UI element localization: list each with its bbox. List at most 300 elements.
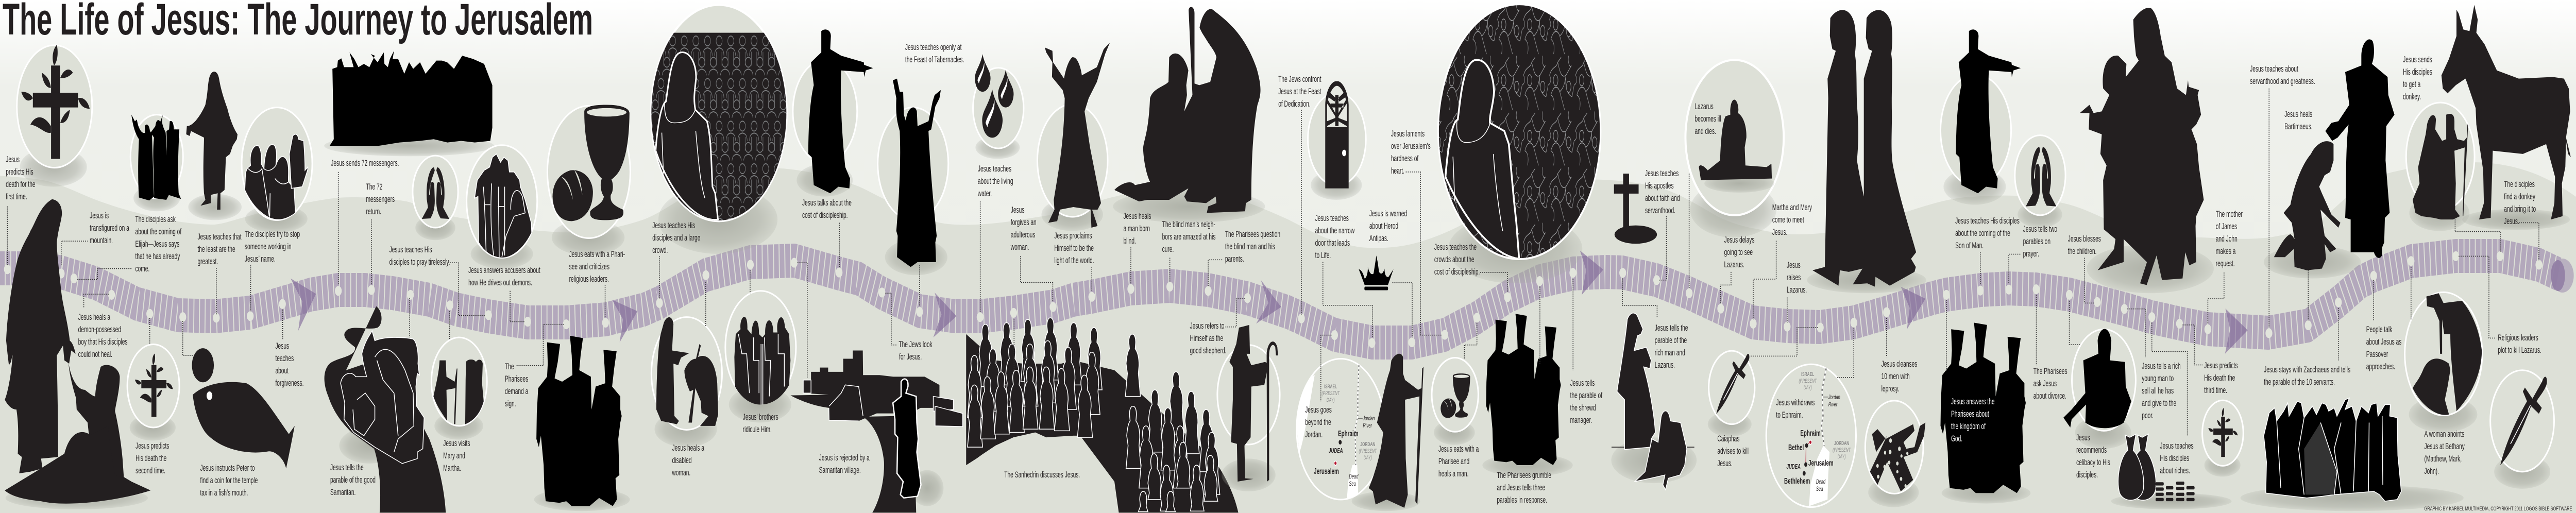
illustration: two disciples xyxy=(2406,102,2475,231)
timeline stops xyxy=(4,264,186,322)
label: find a coin for the temple xyxy=(200,476,258,485)
illustration: Pharisees answered xyxy=(1940,322,2030,504)
illustration: Jesus' brothers xyxy=(725,291,796,422)
map labels: Ephraim map: Bethlehem xyxy=(1784,476,1810,486)
map labels: Ephraim map: JUDEA xyxy=(1786,463,1801,471)
timeline stops xyxy=(1298,313,1480,348)
label: Himself as the xyxy=(1190,334,1223,343)
===== section 11 ===== xyxy=(2148,39,2464,511)
map labels: Ephraim map: Bethel xyxy=(1788,443,1804,452)
icon: narrow door xyxy=(1308,81,1366,200)
label: about the narrow xyxy=(1315,226,1354,235)
label: Passover xyxy=(2366,350,2388,359)
label: Jesus is xyxy=(90,211,109,220)
label: about divorce. xyxy=(2033,391,2066,401)
timeline stops xyxy=(1717,304,1890,333)
illustration: Samaritan village xyxy=(790,351,963,426)
label: Jesus answers the xyxy=(1951,397,1995,406)
illustration: crowd with arms raised xyxy=(1438,5,1600,283)
===== section 1 ===== xyxy=(4,45,295,509)
label: cost of discipleship. xyxy=(802,211,848,220)
leader lines xyxy=(1301,110,1507,401)
label: becomes ill xyxy=(1694,114,1721,124)
label: Samaritan village. xyxy=(819,466,861,475)
label: Jesus tells the xyxy=(1655,323,1688,333)
label: sign. xyxy=(505,399,516,408)
label: and bring it to xyxy=(2504,204,2536,214)
icon: fish with coin xyxy=(192,348,295,469)
label: Pharisee and xyxy=(1438,457,1469,466)
label: find a donkey xyxy=(2504,192,2535,201)
label: Jesus teaches xyxy=(978,164,1011,174)
map: beyond the Jordan xyxy=(1297,358,1385,500)
label: God. xyxy=(1951,434,1962,443)
label: for Jesus. xyxy=(899,352,922,362)
label: Jesus sends xyxy=(2403,55,2432,64)
label: about faith and xyxy=(1645,194,1680,203)
label: cost of discipleship. xyxy=(1434,267,1480,277)
label: Jesus teaches His xyxy=(389,245,432,254)
label: raises xyxy=(1787,273,1801,282)
label: the parable of xyxy=(1570,391,1602,400)
icon: living water drops xyxy=(973,54,1024,159)
label: parables on xyxy=(2023,237,2050,246)
label: boy that His disciples xyxy=(78,337,128,347)
illustration: Jesus on road xyxy=(863,379,943,512)
label: (Matthew, Mark, xyxy=(2425,454,2462,464)
label: His disciples xyxy=(2403,67,2432,77)
label: about the coming of xyxy=(135,227,181,236)
label: woman. xyxy=(672,468,690,477)
arrow xyxy=(612,300,637,343)
label: Jesus blesses xyxy=(2068,234,2101,244)
leader lines xyxy=(1092,247,1245,327)
leader lines xyxy=(659,223,839,379)
label: Pharisees about xyxy=(1951,409,1989,419)
illustration: accusers xyxy=(467,145,537,269)
label: Jesus predicts xyxy=(2204,361,2238,370)
label: People talk xyxy=(2366,325,2392,334)
label: The Jews confront xyxy=(1278,75,1321,84)
illustration: bread and cup xyxy=(547,105,630,255)
illustration: lepers' hands xyxy=(1865,401,1925,507)
label: death for the xyxy=(6,180,36,189)
===== section 4 ===== xyxy=(650,5,963,447)
label: A woman anoints xyxy=(2425,430,2464,439)
label: demand a xyxy=(505,387,529,396)
label: the parable of the 10 servants. xyxy=(2264,378,2335,387)
map: Ephraim xyxy=(1766,364,1856,507)
label: Jesus goes xyxy=(1305,405,1332,415)
label: Jesus heals xyxy=(1123,212,1151,221)
label: Martha and Mary xyxy=(1772,203,1812,212)
illustration: Jesus blesses children xyxy=(2080,8,2214,293)
map labels: Ephraim map xyxy=(1784,371,1851,493)
label: request. xyxy=(2216,259,2235,268)
map labels: Jordan map: Ephraim xyxy=(1338,429,1358,438)
map labels: Ephraim map: Ephraim xyxy=(1800,429,1821,438)
label: John). xyxy=(2425,467,2439,476)
label: about riches. xyxy=(2160,466,2190,475)
label: donkey. xyxy=(2403,92,2421,101)
label: Jesus heals xyxy=(2284,110,2312,119)
label: Jesus is rejected by a xyxy=(819,453,870,463)
illustration: Lazarus sick xyxy=(1685,60,1784,237)
illustration: Jesus points xyxy=(793,29,873,197)
leader lines xyxy=(1540,174,1689,370)
icon: cross third prediction xyxy=(2202,400,2243,476)
label: someone working in xyxy=(245,242,292,251)
map labels: Ephraim map: ISRAEL xyxy=(1801,371,1815,377)
map labels: Ephraim map: Dead xyxy=(1816,478,1825,486)
label: The blind man’s neigh- xyxy=(1162,220,1215,229)
label: the blind man and his xyxy=(1225,242,1275,251)
label: parables in response. xyxy=(1497,495,1547,505)
icon: grave cross xyxy=(1614,174,1657,244)
label: bors are amazed at his xyxy=(1162,232,1216,242)
map labels: Ephraim map: Sea xyxy=(1816,486,1823,493)
illustration: Jesus heals Bartimaeus xyxy=(2325,39,2395,258)
===== section 10 ===== xyxy=(1940,8,2231,509)
timeline stops xyxy=(2148,298,2342,338)
map labels: Jordan map: JORDAN xyxy=(1360,441,1375,447)
label: Jesus xyxy=(275,341,289,351)
label: Jesus teaches that xyxy=(197,232,242,242)
label: Bartimaeus. xyxy=(2284,122,2313,131)
illustration: Jesus heals the boy xyxy=(5,199,150,509)
map labels: Jordan map: ISRAEL xyxy=(1324,383,1337,389)
ribbon end cap xyxy=(2551,259,2574,293)
label: Jesus xyxy=(1787,261,1801,270)
map labels: Ephraim map: DAY) xyxy=(1804,384,1812,390)
label: rich man and xyxy=(1655,348,1685,357)
illustration: Sanhedrin xyxy=(966,318,1239,512)
label: Jesus sends 72 messengers. xyxy=(331,159,399,168)
label: water. xyxy=(977,189,992,198)
label: poor. xyxy=(2142,411,2154,420)
===== section 5 ===== xyxy=(863,43,1239,512)
icon: cross with leaves xyxy=(17,45,92,187)
label: first time. xyxy=(6,192,27,201)
arrow xyxy=(1901,287,1925,329)
map labels: Ephraim map: River xyxy=(1828,401,1838,408)
arrow xyxy=(933,293,957,337)
label: Jesus at the Feast xyxy=(1278,87,1321,96)
label: Jesus cleanses xyxy=(1882,360,1918,369)
label: and Jesus tells three xyxy=(1497,483,1545,492)
label: about xyxy=(275,366,289,375)
map labels: Jordan map: DAY) xyxy=(1364,454,1372,460)
label: woman. xyxy=(1010,243,1029,252)
label: beyond the xyxy=(1305,418,1331,427)
label: about the coming of the xyxy=(1955,229,2010,238)
illustration: good shepherd xyxy=(1217,325,1280,491)
label: Jesus’ brothers xyxy=(743,413,778,422)
label: blind. xyxy=(1123,236,1136,246)
label: Lazarus. xyxy=(1787,285,1807,295)
timeline stops xyxy=(213,285,414,322)
label: cure. xyxy=(1162,245,1174,254)
label: Jesus tells a rich xyxy=(2142,362,2181,371)
map labels: Ephraim map: JORDAN xyxy=(1834,440,1849,446)
leader lines xyxy=(216,172,410,339)
map labels: Jordan map: Sea xyxy=(1349,481,1356,488)
===== section 12 ===== xyxy=(2370,5,2571,489)
leader lines xyxy=(7,207,193,355)
leader lines xyxy=(1946,252,2145,372)
label: makes a xyxy=(2216,247,2236,256)
timeline stops xyxy=(1504,268,1692,302)
label: The disciples xyxy=(2504,180,2535,189)
label: transfigured on a xyxy=(90,224,129,233)
label: the Feast of Tabernacles. xyxy=(905,55,964,64)
label: ask Jesus xyxy=(2033,379,2057,388)
label: Jordan. xyxy=(1305,430,1323,439)
map labels: Jordan map: JUDEA xyxy=(1329,447,1343,455)
leader lines xyxy=(2152,89,2338,436)
label: prayer. xyxy=(2023,249,2039,259)
map labels: Ephraim map: DAY) xyxy=(1838,453,1846,459)
label: disciples. xyxy=(2076,470,2098,480)
label: The xyxy=(505,362,514,371)
label: servanthood. xyxy=(1645,206,1675,215)
illustration: Zacchaeus crowd xyxy=(2241,398,2464,511)
label: predicts His xyxy=(6,167,33,177)
label: teaches xyxy=(275,354,294,363)
leader lines xyxy=(448,263,605,366)
label: servanthood and greatness. xyxy=(2250,77,2315,86)
label: and give to the xyxy=(2142,399,2176,408)
label: the least are the xyxy=(197,245,235,254)
label: The Sanhedrin discusses Jesus. xyxy=(1004,470,1080,480)
label: the children. xyxy=(2068,247,2096,256)
illustration: good Samaritan xyxy=(325,306,446,512)
label: His apostles xyxy=(1645,181,1674,191)
label: parents. xyxy=(1225,254,1244,264)
illustration: three disciples xyxy=(130,115,183,211)
label: the shrewd xyxy=(1570,403,1596,413)
label: Lazarus. xyxy=(1724,260,1744,269)
label: Jesus predicts xyxy=(135,441,170,451)
timeline stops xyxy=(447,300,609,329)
label: His death the xyxy=(2204,373,2235,383)
illustration: Feast of Tabernacles xyxy=(878,79,948,275)
label: heart. xyxy=(1391,166,1404,176)
label: messengers xyxy=(366,195,395,204)
label: forgiveness. xyxy=(275,379,303,388)
icon: money bags and coins xyxy=(2111,434,2231,509)
label: The Jews look xyxy=(899,340,933,349)
leader lines xyxy=(885,201,1053,370)
label: Jesus tells two xyxy=(2023,225,2057,234)
map labels: Ephraim map: (PRESENT xyxy=(1799,378,1817,384)
label: Antipas. xyxy=(1369,234,1388,243)
label: crowds about the xyxy=(1434,255,1475,264)
label: disabled xyxy=(672,456,692,465)
illustration: Bartimaeus kneeling xyxy=(2264,141,2361,279)
map labels: Jordan map xyxy=(1314,383,1377,488)
label: that he has already xyxy=(135,252,180,261)
leader lines xyxy=(2374,219,2539,338)
label: and John xyxy=(2216,234,2238,244)
label: The disciples try to stop xyxy=(245,230,300,239)
label: Jesus teaches His xyxy=(652,221,695,230)
label: Jesus proclaims xyxy=(1054,231,1092,241)
label: The disciples ask xyxy=(135,215,176,224)
label: Jesus teaches the xyxy=(1434,243,1477,252)
label: Jesus instructs Peter to xyxy=(200,464,255,473)
icon: cross small xyxy=(127,344,179,440)
label: Jesus talks about the xyxy=(802,198,852,208)
map labels: Jordan map: Dead xyxy=(1349,473,1359,481)
label: The Pharisees xyxy=(2033,367,2067,376)
label: second time. xyxy=(135,466,165,475)
label: Lazarus xyxy=(1694,102,1714,111)
illustration: donkey xyxy=(2442,5,2571,230)
map labels: Jordan map: Jerusalem xyxy=(1314,467,1339,476)
label: Jesus xyxy=(1011,206,1025,215)
label: Jesus. xyxy=(1717,459,1733,468)
label: Lazarus. xyxy=(1655,361,1675,370)
label: Jesus teaches openly at xyxy=(905,43,962,52)
label: Jesus teaches xyxy=(1315,214,1349,223)
label: how He drives out demons. xyxy=(468,278,532,287)
label: The mother xyxy=(2216,210,2243,219)
illustration: Martha and Mary xyxy=(1807,10,1926,293)
label: Samaritan. xyxy=(330,488,355,497)
label: heals a man. xyxy=(1438,469,1468,478)
label: approaches. xyxy=(2366,362,2395,371)
label: disciples and a large xyxy=(652,233,700,243)
label: adulterous xyxy=(1011,230,1036,240)
label: to get a xyxy=(2403,80,2421,89)
label: The Pharisees grumble xyxy=(1497,471,1551,480)
label: going to see xyxy=(1724,248,1753,257)
label: sell all he has xyxy=(2142,386,2174,396)
label: come. xyxy=(135,264,149,273)
label: return. xyxy=(366,207,381,216)
map labels: Jordan map: DAY) xyxy=(1327,397,1335,403)
arrow xyxy=(1580,251,1603,295)
timeline stops xyxy=(878,287,1057,322)
arrow xyxy=(1256,280,1281,323)
timeline stops xyxy=(2370,251,2543,281)
label: about Herod xyxy=(1369,221,1398,231)
label: about the living xyxy=(978,177,1013,186)
illustration: Pharisees xyxy=(534,336,630,511)
illustration: bread and cup small xyxy=(1432,358,1478,445)
label: Jesus is warned xyxy=(1369,209,1407,218)
credit line: GRAPHIC BY KARBEL MULTIMEDIA, COPYRIGHT 2011 LOGOS BIBLE SOFTWARE xyxy=(2425,505,2572,511)
label: Jesus xyxy=(6,155,20,164)
illustration: Pharisees grumble xyxy=(1482,314,1573,476)
label: His disciples xyxy=(2160,454,2189,463)
label: Jesus stays with Zacchaeus and tells xyxy=(2264,365,2350,374)
label: to Ephraim. xyxy=(1776,411,1803,420)
label: forgives an xyxy=(1011,218,1037,227)
label: manager. xyxy=(1570,416,1592,425)
label: see and criticizes xyxy=(569,262,609,271)
===== section 3 ===== xyxy=(431,105,637,511)
illustration: Jesus recommends celibacy xyxy=(2063,329,2136,449)
label: the kingdom of xyxy=(1951,422,1986,431)
===== section 2 ===== xyxy=(213,51,494,512)
timeline stops xyxy=(656,258,842,308)
label: Jesus teaches about xyxy=(2250,64,2298,74)
label: Jesus tells the xyxy=(330,463,364,472)
label: Mary and xyxy=(443,451,465,460)
illustration: light of the world xyxy=(1037,43,1110,231)
illustration: Mary and Martha xyxy=(431,337,487,440)
label: Jesus heals a xyxy=(78,313,110,322)
label: third time. xyxy=(2204,386,2227,395)
label: Caiaphas xyxy=(1717,434,1740,443)
leader lines xyxy=(1720,241,1887,378)
label: to Life. xyxy=(1315,251,1331,260)
label: Pharisees xyxy=(505,374,528,384)
label: advises to kill xyxy=(1717,447,1749,456)
illustration: woman anoints Jesus xyxy=(2405,292,2482,433)
label: tax in a fish’s mouth. xyxy=(200,488,248,498)
label: Jesus refers to xyxy=(1190,321,1224,331)
label: ridicule Him. xyxy=(743,425,772,434)
map labels: Jordan map: River xyxy=(1363,422,1372,430)
label: celibacy to His xyxy=(2076,458,2110,467)
icon: dagger large xyxy=(2490,370,2554,489)
map labels: Jordan map: (PRESENT xyxy=(1359,448,1377,454)
label: Jesus teaches xyxy=(2160,441,2194,451)
illustration: walking Jesus xyxy=(1352,354,1423,511)
===== section 9 ===== xyxy=(1708,10,1926,507)
label: Jesus visits xyxy=(443,439,470,448)
label: about Jesus as xyxy=(2366,337,2402,347)
arrow xyxy=(291,279,316,331)
timeline stops xyxy=(1089,282,1251,303)
label: Martha. xyxy=(443,464,461,473)
label: good shepherd. xyxy=(1190,346,1226,355)
label: Jesus xyxy=(2076,433,2090,442)
===== section 8 ===== xyxy=(1504,60,1784,490)
icon: dagger xyxy=(1708,351,1755,437)
illustration: Jesus teaches large crowd xyxy=(650,5,788,254)
illustration: disabled woman healed xyxy=(651,317,722,447)
label: of James xyxy=(2216,222,2237,231)
illustration: Jesus teaches xyxy=(186,72,242,220)
label: Jesus. xyxy=(1772,228,1787,237)
arrow xyxy=(2225,309,2248,354)
label: Jesus tells xyxy=(1570,379,1595,388)
label: Son of Man. xyxy=(1955,241,1984,250)
illustration: coming of the Son of Man xyxy=(1940,29,2021,205)
label: plot to kill Lazarus. xyxy=(2498,346,2541,355)
label: over Jerusalem's xyxy=(1391,142,1431,151)
label: come to meet xyxy=(1772,215,1804,225)
timeline ribbon xyxy=(0,256,2558,343)
label: a man born xyxy=(1123,224,1150,233)
label: parable of the xyxy=(1655,336,1687,345)
label: Elijah—Jesus says xyxy=(135,240,179,249)
label: door that leads xyxy=(1315,238,1350,248)
label: Jesus teaches His disciples xyxy=(1955,216,2020,226)
label: and dies. xyxy=(1694,127,1716,136)
illustration: Jesus heals blind man xyxy=(1113,7,1265,223)
label: mountain. xyxy=(90,236,113,245)
label: The Pharisees question xyxy=(1225,230,1280,239)
===== section 7 ===== xyxy=(1297,5,1600,511)
label: Jesus at Bethany xyxy=(2425,442,2465,451)
map labels: Jordan map: (PRESENT xyxy=(1321,390,1340,396)
label: His death the xyxy=(135,454,166,463)
